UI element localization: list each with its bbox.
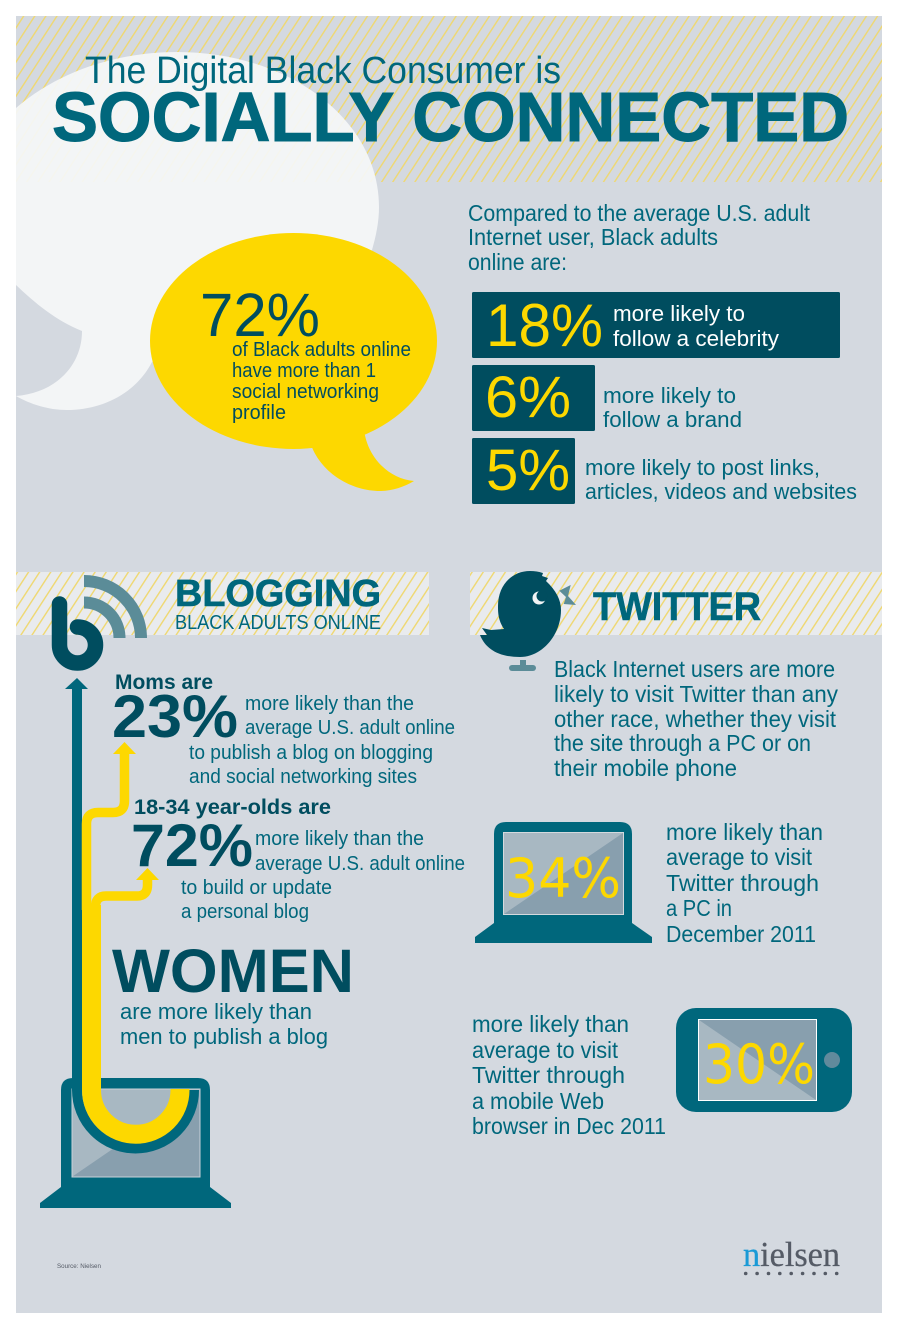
icon: twitter bird — [480, 571, 576, 671]
comparison intro text: Compared to the average U.S. adult — [468, 200, 811, 226]
blogging heading band: BLACK ADULTS ONLINE — [175, 612, 381, 634]
yellow speech bubble: 72%: social networking — [232, 381, 379, 403]
comparison intro text: online are: — [468, 249, 567, 275]
PC stat text: a PC in — [666, 895, 732, 921]
PC stat text — [666, 819, 823, 947]
twitter intro text: other race, whether they visit — [554, 706, 837, 732]
nielsen logo: nielsen — [743, 1235, 840, 1274]
stat: 18% — [472, 292, 840, 359]
stat: 18-34 year-olds 72%: a personal blog — [181, 901, 309, 923]
stat: women — [112, 937, 354, 1049]
mobile stat text — [472, 1011, 666, 1139]
stat: 18-34 year-olds 72%: 72% — [131, 812, 253, 879]
phone icon: 30% — [676, 1008, 852, 1112]
stat: moms 23%: to publish a blog on blogging — [189, 742, 433, 764]
twitter intro text: their mobile phone — [554, 755, 737, 781]
twitter heading band — [470, 572, 882, 635]
stat: 5%: articles, videos and websites — [585, 479, 857, 504]
blogging heading band — [16, 572, 429, 635]
phone icon: 30%: 30% — [703, 1033, 815, 1096]
twitter intro text: the site through a PC or on — [554, 730, 811, 756]
yellow speech bubble: 72%: profile — [232, 402, 286, 424]
PC stat text: Twitter through — [666, 870, 819, 896]
mobile stat text: a mobile Web — [472, 1088, 604, 1114]
mobile stat text: average to visit — [472, 1037, 619, 1063]
stat: 18%: follow a celebrity — [613, 326, 779, 351]
comparison intro text: Internet user, Black adults — [468, 224, 718, 250]
stat: 18-34 year-olds 72%: average U.S. adult online — [255, 853, 465, 875]
PC stat text: average to visit — [666, 844, 813, 870]
stat: 18-34 year-olds 72%: to build or update — [181, 877, 332, 899]
mobile stat text: Twitter through — [472, 1062, 625, 1088]
twitter intro text: Black Internet users are more — [554, 656, 835, 682]
stat: women: are more likely than — [120, 999, 312, 1024]
stat: 18%: 18% — [486, 292, 603, 359]
header hatch band — [16, 16, 882, 182]
blogging heading band: BLOGGING — [175, 573, 381, 615]
stat: moms 23%: and social networking sites — [189, 766, 417, 788]
icon: blog symbol — [60, 581, 141, 663]
source note: Source: Nielsen — [57, 1263, 101, 1270]
stat: 6%: follow a brand — [603, 407, 742, 432]
stat: 6% — [472, 365, 742, 432]
yellow speech bubble: 72%: have more than 1 — [232, 360, 376, 382]
comparison intro text — [468, 200, 811, 275]
yellow branching arrows — [86, 742, 180, 1134]
stat: 18-34 year-olds 72% — [131, 796, 465, 923]
mobile stat text: browser in Dec 2011 — [472, 1113, 666, 1139]
stat: 5%: more likely to post links, — [585, 455, 820, 480]
stat: 6%: 6% — [485, 365, 571, 430]
stat: moms 23%: 23% — [112, 683, 238, 750]
laptop icon: 34% — [475, 822, 652, 943]
teal arrow — [65, 678, 194, 1148]
twitter intro text: likely to visit Twitter than any — [554, 681, 838, 707]
stat: moms 23%: more likely than the — [245, 693, 414, 715]
title: SOCIALLY CONNECTED — [52, 78, 849, 156]
stat: 18-34 year-olds 72%: 18-34 year-olds are — [134, 796, 331, 819]
stat: moms 23%: average U.S. adult online — [245, 717, 455, 739]
stat: 6%: more likely to — [603, 383, 736, 408]
stat: women: WOMEN — [112, 937, 354, 1005]
twitter intro text — [554, 656, 838, 781]
stat: women: men to publish a blog — [120, 1024, 328, 1049]
stat: 18-34 year-olds 72%: more likely than the — [255, 828, 424, 850]
stat: 5%: 5% — [486, 438, 570, 503]
PC stat text: more likely than — [666, 819, 823, 845]
stat: 5% — [472, 438, 857, 504]
title: The Digital Black Consumer is — [85, 50, 561, 92]
mobile stat text: more likely than — [472, 1011, 629, 1037]
laptop illustration: blogging — [40, 1078, 231, 1208]
yellow speech bubble: 72%: 72% — [200, 281, 320, 349]
stat: moms 23% — [112, 671, 455, 788]
yellow speech bubble: 72%: of Black adults online — [232, 339, 411, 361]
stat: 18%: more likely to — [613, 301, 745, 326]
laptop icon: 34%: 34% — [505, 847, 621, 910]
twitter heading band: TWITTER — [593, 585, 761, 629]
yellow speech bubble: 72% — [150, 233, 437, 491]
PC stat text: December 2011 — [666, 921, 816, 947]
stat: moms 23%: Moms are — [115, 671, 213, 694]
large white speech bubble — [16, 52, 379, 410]
